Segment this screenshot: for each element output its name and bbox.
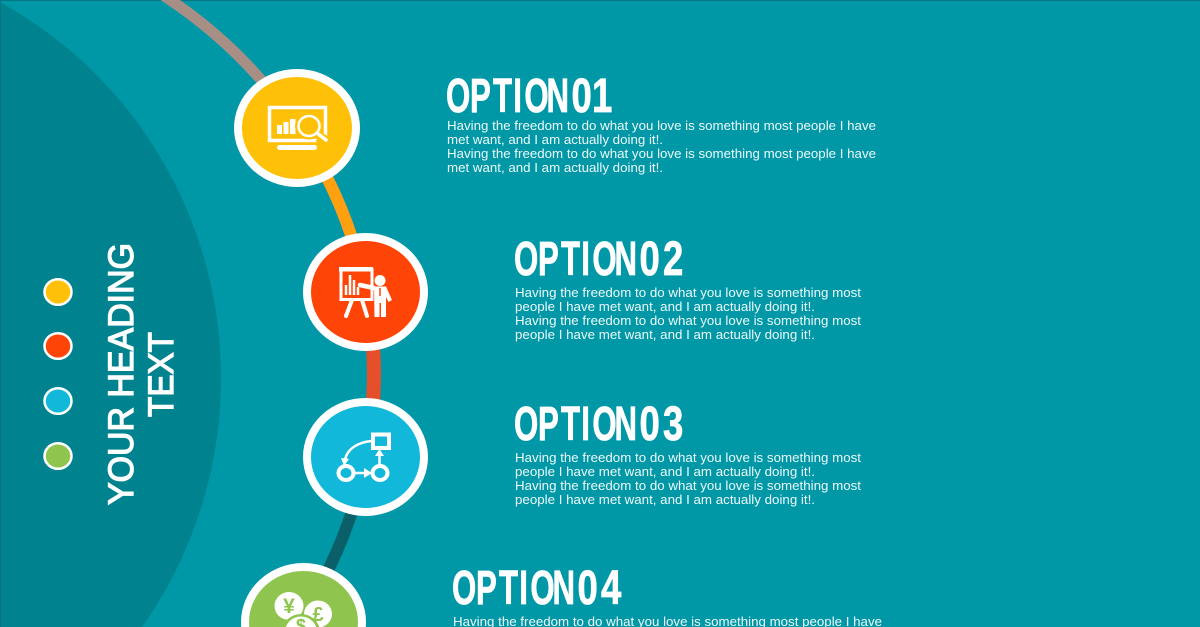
sidebar legend dots xyxy=(44,279,72,469)
option 4 text xyxy=(452,560,882,627)
option 2 body: people I have met want, and I am actually doing it!. xyxy=(515,299,815,314)
option 1 body: Having the freedom to do what you love is something most people I have xyxy=(447,146,876,161)
option 1 body: Having the freedom to do what you love is something most people I have xyxy=(447,118,876,133)
timeline segment: brown xyxy=(155,0,298,128)
legend dot: yellow xyxy=(44,279,72,305)
option 3 text xyxy=(514,396,861,507)
icon: presenter at board xyxy=(339,267,392,317)
option 1 body xyxy=(447,118,876,175)
option 2 body: Having the freedom to do what you love is something most xyxy=(515,285,861,300)
option 3 title: OPTION xyxy=(514,396,637,451)
legend dot: blue xyxy=(44,388,72,414)
option 2 body xyxy=(515,285,861,342)
vertical heading xyxy=(102,243,181,505)
option 2 node xyxy=(307,237,424,347)
icon: flow diagram xyxy=(338,434,389,480)
option 3 body: people I have met want, and I am actually doing it!. xyxy=(515,492,815,507)
option 3 body: Having the freedom to do what you love is something most xyxy=(515,478,861,493)
option 2 text xyxy=(514,231,861,342)
option 3 body: people I have met want, and I am actually doing it!. xyxy=(515,464,815,479)
option 2 body: people I have met want, and I am actually doing it!. xyxy=(515,327,815,342)
option 1 text xyxy=(446,68,876,175)
legend dot: green xyxy=(44,443,72,469)
heading line 2: TEXT xyxy=(142,332,181,417)
timeline segment: red xyxy=(366,292,374,457)
option 1 title: 01 xyxy=(572,69,612,123)
curved timeline xyxy=(155,0,374,622)
option 3 body xyxy=(515,450,861,507)
option 3 node xyxy=(307,402,424,512)
node circle: green xyxy=(245,567,362,627)
timeline segment: orange xyxy=(298,128,366,292)
node circle: yellow xyxy=(238,73,356,183)
icon: monitor with magnifier xyxy=(270,108,332,150)
icon: currency coins xyxy=(274,592,332,627)
node circle: blue xyxy=(307,402,424,512)
timeline segment: dark teal xyxy=(298,457,366,622)
icon: currency coins: ¥ xyxy=(283,595,295,618)
option 4 title: OPTION xyxy=(452,560,575,615)
legend dot: red xyxy=(44,333,72,359)
heading line 1: YOUR HEADING xyxy=(102,243,141,505)
option 2 body: Having the freedom to do what you love is something most xyxy=(515,313,861,328)
option 1 node xyxy=(238,73,356,183)
icon: currency coins: £ xyxy=(312,604,324,626)
option 1 body: met want, and I am actually doing it!. xyxy=(447,132,663,147)
left dark semicircle panel xyxy=(0,0,221,627)
option 2 title: 02 xyxy=(640,232,683,286)
option 1 body: met want, and I am actually doing it!. xyxy=(447,160,663,175)
option 3 body: Having the freedom to do what you love is something most xyxy=(515,450,861,465)
option 4 title: 04 xyxy=(578,561,622,615)
node circle: red xyxy=(307,237,424,347)
option 3 title: 03 xyxy=(640,397,683,451)
option 1 title: OPTION xyxy=(446,68,569,123)
option 2 title: OPTION xyxy=(514,231,637,286)
option 4 node xyxy=(245,567,362,627)
